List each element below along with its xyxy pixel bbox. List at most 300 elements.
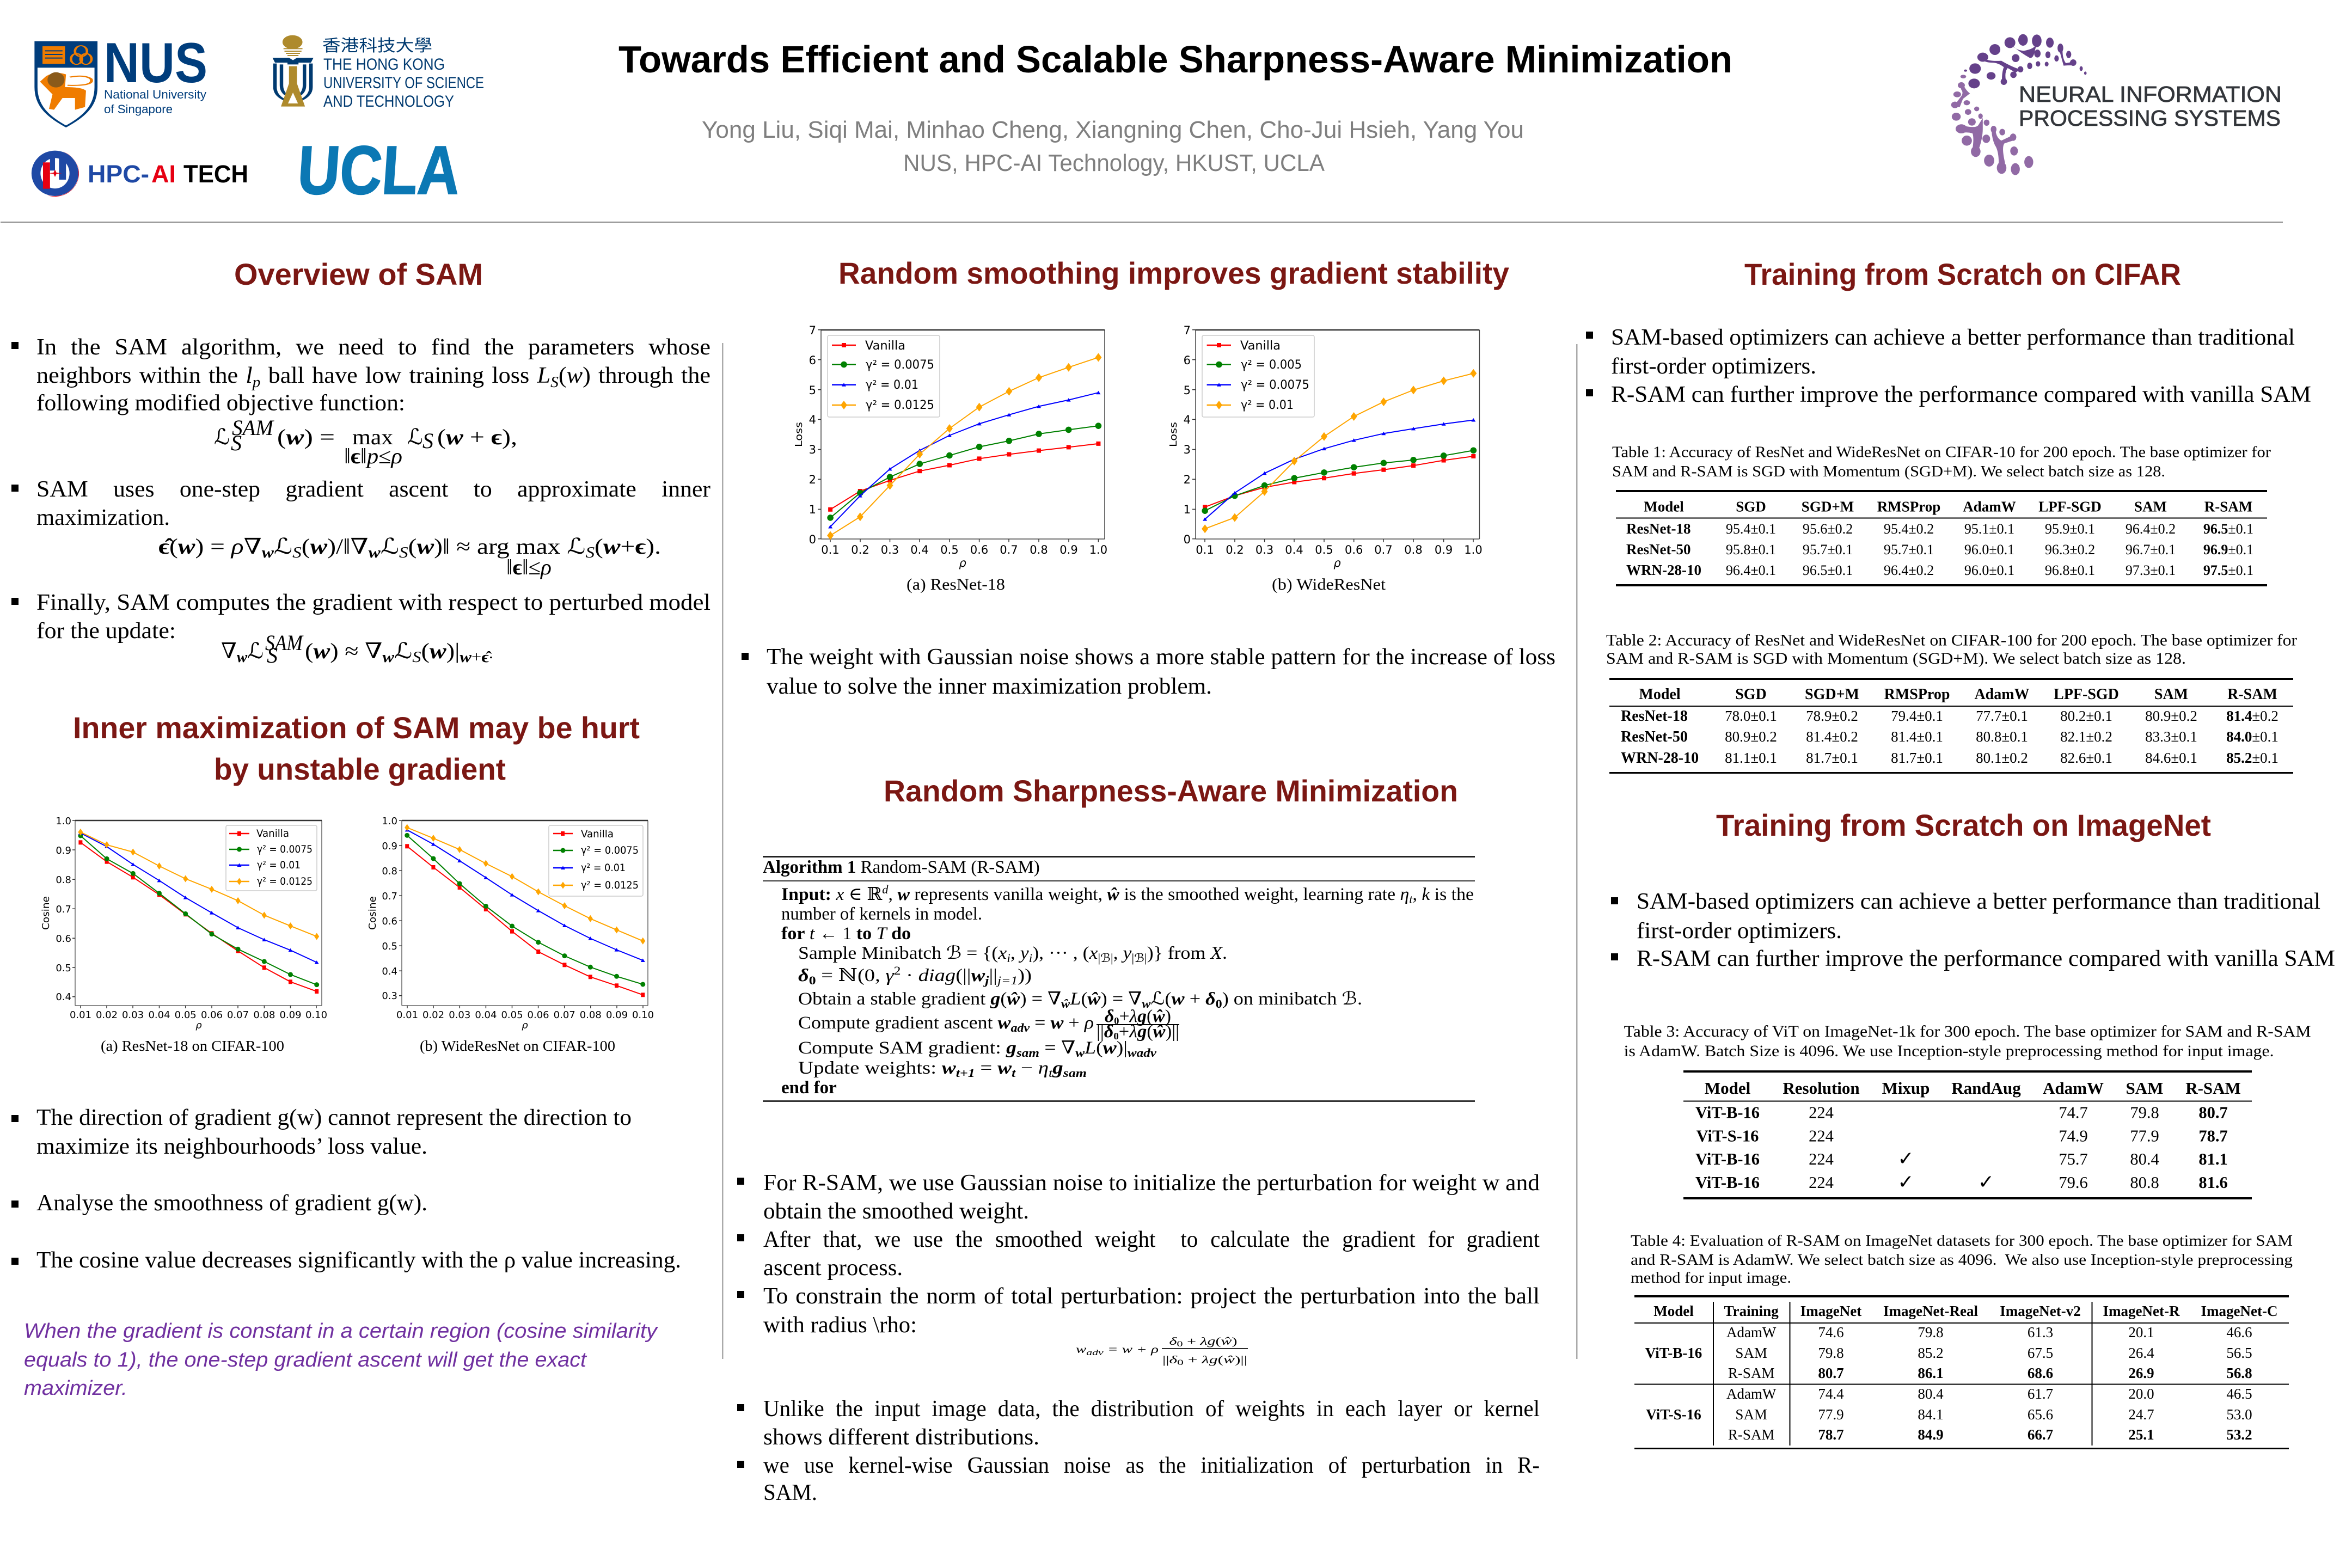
algorithm box: t	[1012, 1066, 1016, 1080]
algorithm box: ,	[1113, 944, 1123, 963]
formula: adversarial weight: adv	[1086, 1349, 1104, 1357]
table 3: 78.7	[2198, 1126, 2228, 1145]
table 1: SAM	[2134, 499, 2167, 515]
table 1: 96.8±0.1	[2045, 562, 2095, 578]
panel: inner maximization	[11, 710, 681, 1400]
chart: loss WideResNet: 1	[1184, 503, 1191, 516]
table 3	[1624, 1022, 2311, 1199]
chart: cosine ResNet-18: ρ	[195, 1020, 202, 1031]
panel: random smoothing	[742, 256, 1555, 699]
table 2: SGD	[1735, 686, 1767, 703]
legend: γ² = 0.0075	[866, 358, 934, 372]
chart: loss ResNet-18: ρ	[959, 556, 966, 569]
logo: NUS	[36, 32, 207, 126]
formula: gradient update	[221, 630, 493, 667]
chart: loss ResNet-18: 2	[809, 473, 816, 486]
table 2: ResNet-50	[1621, 728, 1688, 745]
chart: cosine WideResNet: 1.0	[382, 816, 397, 827]
chart: loss WideResNet: 1.0	[1464, 543, 1483, 556]
legend: γ² = 0.0075	[581, 844, 639, 856]
panel: CIFAR	[1586, 257, 2311, 774]
table 4: 84.9	[1918, 1426, 1944, 1443]
algorithm box: wadv	[1128, 1046, 1156, 1059]
header band	[32, 32, 2282, 209]
formula: perturbation: (	[408, 534, 416, 559]
table 1: 96.4±0.1	[1726, 562, 1776, 578]
table 1: 96.3±0.2	[2045, 542, 2095, 558]
legend	[549, 825, 643, 896]
logo: HPC-AI Tech: TECH	[183, 160, 248, 188]
table 2: 78.0±0.1	[1725, 708, 1777, 724]
text block: kernel-wise noise: SAM.	[763, 1480, 817, 1505]
table 2: WRN-28-10	[1621, 750, 1699, 767]
text block: R-SAM description	[737, 1171, 1540, 1338]
text block: SAM objective: In the SAM algorithm, we need to find the parameters whose	[36, 335, 710, 360]
table 1: 95.8±0.1	[1726, 542, 1776, 558]
algorithm box: ℒ(	[1150, 989, 1172, 1009]
chart: cosine ResNet-18: 0.9	[56, 845, 71, 856]
algorithm box: −	[1015, 1058, 1038, 1078]
table 3: 80.8	[2130, 1173, 2159, 1192]
text block: ImageNet points: SAM-based optimizers can achieve a better performance than traditional	[1637, 889, 2320, 914]
logo: HKUST	[272, 32, 484, 111]
panel: random SAM	[737, 774, 1540, 1505]
caption: (a) ResNet-18 on CIFAR-100	[101, 1038, 284, 1054]
logo: HKUST: UNIVERSITY OF SCIENCE	[323, 74, 484, 92]
table 2: Table 2: Accuracy of ResNet and WideResNet on CIFAR-100 for 200 epoch. The base optimizer for	[1606, 632, 2297, 649]
text block: gradient direction points: maximize its neighbourhoods’ loss value.	[36, 1134, 427, 1159]
chart: cosine ResNet-18	[40, 816, 327, 1054]
table 4: AdamW	[1726, 1386, 1777, 1402]
algorithm box: δ	[1105, 1007, 1114, 1026]
text block: SAM objective: following modified objective function:	[36, 391, 405, 416]
chart: loss ResNet-18: 6	[809, 354, 816, 367]
table 4: SAM	[1735, 1345, 1767, 1361]
table 2: 84.6±0.1	[2145, 750, 2197, 766]
chart: cosine ResNet-18: 0.4	[56, 991, 71, 1003]
chart: loss ResNet-18: 0.6	[970, 543, 988, 556]
logo: HPC-AI Tech: AI	[151, 160, 176, 188]
algorithm box: Compute SAM gradient: g	[798, 1038, 1015, 1058]
formula: perturbation: ℒ	[381, 534, 399, 559]
text block: SAM objective: w) through the	[567, 363, 704, 388]
algorithm box: i	[1029, 951, 1032, 965]
table 3: ✓	[1897, 1171, 1914, 1193]
chart: loss WideResNet	[1168, 324, 1483, 593]
table 2: 80.9±0.2	[2145, 708, 2197, 724]
algorithm box: w + ρ	[1050, 1013, 1093, 1033]
table 2: 84.0±0.1	[2226, 728, 2278, 745]
table 3: 77.9	[2130, 1126, 2159, 1145]
legend: γ² = 0.005	[1241, 358, 1302, 372]
formula: perturbation: w	[262, 544, 274, 561]
table 2: 80.9±0.2	[1725, 728, 1777, 745]
text block: SAM objective: (	[559, 363, 567, 388]
table 3: R-SAM	[2185, 1079, 2241, 1098]
algorithm box: w	[997, 1058, 1012, 1078]
algorithm box: diag (||w	[918, 966, 983, 985]
formula: gradient update: w	[237, 649, 248, 666]
chart: loss ResNet-18	[793, 324, 1107, 593]
formula: gradient update: (w) ≈ ∇	[305, 639, 375, 663]
text block: CIFAR points: R-SAM can further improve the performance compared with vanilla SAM	[1611, 382, 2311, 407]
formula: gradient update: w)|	[430, 639, 458, 663]
chart: cosine WideResNet: 0.7	[382, 891, 397, 902]
legend: γ² = 0.0125	[581, 879, 639, 891]
chart: loss WideResNet: 0.5	[1315, 543, 1333, 556]
caption: (b) WideResNet on CIFAR-100	[420, 1038, 615, 1054]
logo: NUS: of Singapore	[104, 102, 173, 116]
chart: loss WideResNet: 6	[1184, 354, 1191, 367]
table 1: 96.5±0.1	[2203, 521, 2253, 537]
caption: (b) WideResNet	[1272, 575, 1386, 593]
table 4: ViT-B-16	[1645, 1345, 1702, 1361]
table 4: 26.4	[2128, 1345, 2154, 1361]
table 2: 83.3±0.1	[2145, 728, 2197, 745]
table 4: ViT-S-16	[1646, 1406, 1701, 1423]
table 1: 95.4±0.1	[1726, 521, 1776, 537]
chart: loss ResNet-18: 1.0	[1089, 543, 1107, 556]
chart: cosine ResNet-18: 0.03	[122, 1009, 144, 1021]
text block: update	[11, 590, 710, 644]
chart: cosine WideResNet: 0.03	[449, 1009, 470, 1021]
algorithm box: y	[1121, 944, 1132, 963]
chart: cosine ResNet-18: 0.08	[253, 1009, 275, 1021]
legend: γ² = 0.0125	[257, 875, 313, 887]
table 3: 80.7	[2198, 1103, 2228, 1122]
chart: loss WideResNet: Loss	[1168, 422, 1179, 447]
table 1: 96.7±0.1	[2126, 542, 2176, 558]
legend: γ² = 0.01	[1241, 399, 1294, 412]
algorithm box: λg(ŵ)	[1130, 1007, 1171, 1026]
text block: SAM objective: L	[536, 363, 550, 388]
table 1: SAM and R-SAM is SGD with Momentum (SGD+M). We select batch size as 128.	[1612, 463, 2165, 480]
chart: cosine WideResNet: 0.08	[580, 1009, 602, 1021]
table 1: WRN-28-10	[1626, 562, 1701, 578]
algorithm box: ||δ	[1097, 1022, 1113, 1042]
table 4: 68.6	[2028, 1365, 2053, 1381]
text block: R-SAM description: To constrain the norm of total perturbation: project the perturbation into the ball	[763, 1284, 1540, 1309]
table 4	[1631, 1232, 2293, 1449]
table 4: 80.4	[1918, 1386, 1944, 1402]
chart: loss ResNet-18: 0.5	[940, 543, 959, 556]
table 3: 79.6	[2059, 1173, 2088, 1192]
chart: loss WideResNet: 0.3	[1255, 543, 1273, 556]
text block: R-SAM description: ascent process.	[763, 1255, 903, 1281]
title: Towards Efficient and Scalable Sharpness-Aware Minimization	[618, 38, 1732, 81]
formula: SAM objective: (w + ϵ),	[437, 425, 517, 449]
chart: loss ResNet-18: 0.2	[851, 543, 869, 556]
table 3: 81.6	[2198, 1173, 2228, 1192]
text block: R-SAM description: obtain the smoothed weight.	[763, 1199, 1029, 1224]
algorithm box: 0	[1216, 997, 1222, 1010]
table 3: ViT-B-16	[1695, 1173, 1760, 1192]
table 4: ImageNet-C	[2201, 1303, 2277, 1319]
heading: CIFAR: Training from Scratch on CIFAR	[1744, 257, 2181, 291]
legend: γ² = 0.01	[257, 859, 301, 871]
chart: loss WideResNet: 0.9	[1435, 543, 1453, 556]
logo: UCLA: UCLA	[295, 132, 463, 209]
table 2: 77.7±0.1	[1976, 708, 2028, 724]
callout: purple note: When the gradient is constant in a certain region (cosine similarity	[24, 1320, 658, 1343]
algorithm box: t	[1409, 892, 1413, 906]
heading: inner maximization	[73, 710, 640, 786]
legend	[1202, 335, 1314, 417]
authors	[702, 117, 1524, 176]
algorithm box: γ	[885, 966, 895, 985]
text block: one-step ascent	[11, 477, 710, 530]
table 2: SAM	[2154, 686, 2188, 703]
table 2: 78.9±0.2	[1806, 708, 1858, 724]
algorithm box: X.	[1210, 944, 1227, 963]
chart: loss WideResNet: 0.6	[1345, 543, 1363, 556]
text block: SAM objective	[11, 335, 710, 416]
table 1: R-SAM	[2204, 499, 2252, 515]
heading: inner maximization: by unstable gradient	[214, 752, 506, 786]
table 1: 97.3±0.1	[2126, 562, 2176, 578]
table 3: ✓	[1897, 1148, 1914, 1169]
algorithm box: Update weights: w	[798, 1058, 954, 1078]
authors: Yong Liu, Siqi Mai, Minhao Cheng, Xiangning Chen, Cho-Jui Hsieh, Yang You	[702, 117, 1524, 143]
text block: gaussian noise stability: The weight with Gaussian noise shows a more stable pattern for the increase of loss	[767, 645, 1555, 670]
table 2	[1606, 632, 2297, 774]
table 4: R-SAM	[1728, 1426, 1774, 1443]
chart: cosine ResNet-18: 0.7	[56, 904, 71, 915]
table 3: 81.1	[2198, 1150, 2228, 1168]
chart: loss ResNet-18: 1	[809, 503, 816, 516]
heading: random smoothing: Random smoothing improves gradient stability	[838, 256, 1509, 290]
algorithm box: w	[1142, 997, 1151, 1010]
table 4: 61.3	[2028, 1324, 2053, 1340]
table 1: Table 1: Accuracy of ResNet and WideResNet on CIFAR-10 for 200 epoch. The base optimizer for	[1612, 443, 2271, 461]
text block: gaussian noise stability	[742, 645, 1555, 699]
chart: cosine WideResNet: Cosine	[367, 896, 378, 930]
table 4: ImageNet-v2	[2000, 1303, 2081, 1319]
text block: SAM objective: S	[550, 374, 559, 391]
algorithm box: end for	[781, 1078, 837, 1098]
chart: cosine WideResNet: 0.5	[382, 941, 397, 952]
table 3: ViT-B-16	[1695, 1150, 1760, 1168]
chart: loss WideResNet: ρ	[1333, 556, 1341, 569]
chart: cosine WideResNet: 0.9	[382, 841, 397, 852]
chart: cosine WideResNet: 0.07	[554, 1009, 575, 1021]
legend	[226, 825, 317, 891]
table 3: 75.7	[2059, 1150, 2088, 1168]
table 4: 86.1	[1918, 1365, 1944, 1381]
table 2: 79.4±0.1	[1891, 708, 1943, 724]
formula: perturbation: ϵ̂(w) = ρ∇	[158, 534, 259, 559]
legend: γ² = 0.0075	[1241, 378, 1309, 392]
algorithm box: = ∇	[1039, 1038, 1075, 1058]
algorithm box: Compute gradient ascent w	[798, 1013, 1010, 1033]
table 2: 85.2±0.1	[2226, 750, 2278, 766]
formula: gradient update: w	[460, 649, 471, 666]
legend: Vanilla	[1240, 339, 1281, 353]
algorithm box: t	[1049, 1066, 1053, 1080]
table 4: 61.7	[2028, 1386, 2053, 1402]
formula: adversarial weight: λg (ŵ )	[1200, 1336, 1235, 1347]
table 4: 53.0	[2226, 1406, 2252, 1423]
table 4: 79.8	[1818, 1345, 1844, 1361]
chart: loss WideResNet: 0.1	[1196, 543, 1214, 556]
algorithm box: t+1	[956, 1066, 975, 1080]
table 3: Model	[1705, 1079, 1751, 1098]
chart: cosine WideResNet: 0.06	[528, 1009, 549, 1021]
table 2: SAM and R-SAM is SGD with Momentum (SGD+M). We select batch size as 128.	[1606, 650, 2186, 667]
table 1: 95.7±0.1	[1884, 542, 1934, 558]
algorithm box: ,	[1010, 944, 1020, 963]
text block: CIFAR points: first-order optimizers.	[1611, 354, 1816, 379]
algorithm box: ||	[989, 966, 997, 985]
text block: kernel-wise noise	[737, 1396, 1540, 1505]
formula: perturbation: S	[585, 544, 595, 561]
formula: perturbation: (	[302, 534, 310, 559]
formula: SAM objective: ℒ	[214, 425, 230, 449]
table 2: 81.4±0.2	[2226, 708, 2278, 724]
algorithm box: j=1	[995, 973, 1018, 987]
formula: gradient update: w	[382, 649, 394, 666]
table 1: 96.4±0.2	[1884, 562, 1934, 578]
panel: overview of SAM	[11, 257, 710, 667]
algorithm box: 0	[809, 973, 816, 987]
text block: one-step ascent: maximization.	[36, 505, 170, 530]
table 4: Training	[1724, 1303, 1779, 1319]
formula: perturbation	[158, 534, 661, 579]
logo: HPC-AI Tech	[32, 151, 248, 197]
chart: cosine WideResNet: 0.01	[396, 1009, 418, 1021]
formula: adversarial weight: w	[1076, 1344, 1083, 1356]
text block: SAM objective: neighbors within the l	[36, 363, 252, 388]
algorithm box: = ℕ(0,	[816, 966, 885, 985]
chart: loss ResNet-18: Loss	[793, 422, 805, 447]
formula: gradient update: S	[412, 649, 421, 666]
chart: loss WideResNet: 7	[1184, 324, 1191, 337]
algorithm box: Sample Minibatch ℬ = {( x	[798, 944, 1006, 963]
formula: adversarial weight: δ	[1169, 1336, 1177, 1347]
algorithm box: =	[1030, 1013, 1050, 1033]
table 4: 26.9	[2128, 1365, 2154, 1381]
heading: ImageNet: Training from Scratch on ImageNet	[1716, 808, 2211, 842]
algorithm box: i	[1007, 951, 1010, 965]
formula: SAM objective: S	[231, 431, 242, 455]
algorithm box: ·	[901, 966, 918, 985]
logo: NeurIPS	[1951, 34, 2282, 175]
formula: adversarial weight: ||δ	[1162, 1354, 1174, 1366]
text block: gaussian noise stability: value to solve the inner maximization problem.	[767, 674, 1212, 699]
heading: inner maximization: Inner maximization of SAM may be hurt	[73, 710, 640, 745]
chart: cosine WideResNet: 0.6	[382, 916, 397, 927]
algorithm box: L	[1069, 989, 1081, 1009]
text block: SAM objective: ball have low training loss	[260, 363, 537, 388]
formula: perturbation: S	[399, 544, 408, 561]
table 4: 56.8	[2226, 1365, 2252, 1381]
formula: perturbation: (	[595, 534, 603, 559]
chart: cosine WideResNet: 0.8	[382, 866, 397, 877]
chart: cosine ResNet-18: 0.01	[70, 1009, 91, 1021]
table 4: Model	[1653, 1303, 1694, 1319]
formula: gradient update: ϵ̂	[481, 649, 492, 666]
table 1: RMSProp	[1877, 499, 1940, 515]
table 3: 74.9	[2059, 1126, 2088, 1145]
algorithm box: sam	[1063, 1066, 1087, 1080]
table 3: 224	[1809, 1150, 1834, 1168]
table 3: 79.8	[2130, 1103, 2159, 1122]
algorithm box: (ŵ) = ∇	[1081, 989, 1138, 1009]
chart: cosine WideResNet: 0.3	[382, 990, 397, 1002]
table 2: SGD+M	[1805, 686, 1859, 703]
text block: CIFAR points	[1586, 325, 2311, 407]
formula: SAM objective	[214, 415, 517, 468]
algorithm box: d	[882, 883, 889, 896]
table 1: ResNet-18	[1626, 520, 1690, 537]
table 4: 67.5	[2028, 1345, 2053, 1361]
chart: loss ResNet-18: 0	[809, 533, 816, 546]
algorithm box: ), ··· , (	[1032, 944, 1089, 963]
text block: gradient direction points	[11, 1105, 681, 1273]
table 1: 96.4±0.2	[2126, 521, 2176, 537]
algorithm box: y	[1018, 944, 1029, 963]
table 2: 81.4±0.1	[1891, 728, 1943, 745]
caption: (a) ResNet-18	[906, 575, 1005, 593]
table 4: 80.7	[1818, 1365, 1844, 1381]
table 2: LPF-SGD	[2054, 686, 2119, 703]
table 1: 95.1±0.1	[1964, 521, 2014, 537]
text block: R-SAM description: with radius \rho:	[763, 1313, 917, 1338]
table 1: Model	[1644, 499, 1684, 515]
table 1: ResNet-50	[1626, 541, 1690, 558]
text block: gradient direction points: The cosine value decreases significantly with the ρ value increasing.	[36, 1248, 681, 1273]
formula: gradient update: .	[489, 645, 493, 662]
table 4: AdamW	[1726, 1324, 1777, 1340]
table 2: 81.7±0.1	[1891, 750, 1943, 766]
text block: gradient direction points: The direction of gradient g(w) cannot represent the direction to	[36, 1105, 632, 1130]
heading: overview of SAM: Overview of SAM	[234, 257, 483, 291]
table 2: 82.1±0.2	[2060, 728, 2112, 745]
table 4: 66.7	[2028, 1426, 2053, 1443]
algorithm box: λg(ŵ)||	[1129, 1022, 1179, 1042]
chart: loss WideResNet: 2	[1184, 473, 1191, 486]
algorithm box: sam	[1016, 1046, 1039, 1059]
chart: loss ResNet-18: 0.3	[881, 543, 899, 556]
table 3: is AdamW. Batch Size is 4096. We use Inception-style preprocessing method for input image.	[1624, 1042, 2274, 1060]
table 4: Table 4: Evaluation of R-SAM on ImageNet datasets for 300 epoch. The base optimizer for SAM	[1631, 1232, 2293, 1250]
chart: loss ResNet-18: 0.8	[1030, 543, 1048, 556]
table 2: Model	[1639, 686, 1681, 703]
formula: SAM objective: S	[422, 428, 433, 453]
formula: SAM objective: (w) =	[277, 425, 335, 449]
algorithm box: +	[1119, 1022, 1129, 1042]
text block: update: for the update:	[36, 618, 176, 644]
formula: gradient update: (	[421, 639, 430, 663]
algorithm box: ,	[889, 885, 897, 904]
chart: cosine WideResNet: 0.05	[501, 1009, 523, 1021]
table 4: ImageNet-R	[2103, 1303, 2180, 1319]
chart: loss ResNet-18: 5	[809, 384, 816, 397]
formula: adversarial weight: +	[1183, 1336, 1200, 1347]
formula: perturbation: w	[369, 544, 381, 561]
algorithm box: k is the	[1422, 885, 1473, 904]
formula: gradient update: +	[471, 649, 481, 666]
table 3: RandAug	[1951, 1079, 2021, 1098]
table 1: 96.5±0.1	[1803, 562, 1853, 578]
chart: loss WideResNet: 0.2	[1226, 543, 1244, 556]
chart: loss WideResNet: 5	[1184, 384, 1191, 397]
chart: loss WideResNet: 0	[1184, 533, 1191, 546]
algorithm box: |ℬ|	[1098, 951, 1113, 965]
algorithm box: adv	[1011, 1021, 1030, 1034]
table 4: and R-SAM is AdamW. We select batch size as 4096. We also use Inception-style preprocessing	[1631, 1251, 2293, 1269]
algorithm box: |ℬ|	[1131, 951, 1147, 965]
